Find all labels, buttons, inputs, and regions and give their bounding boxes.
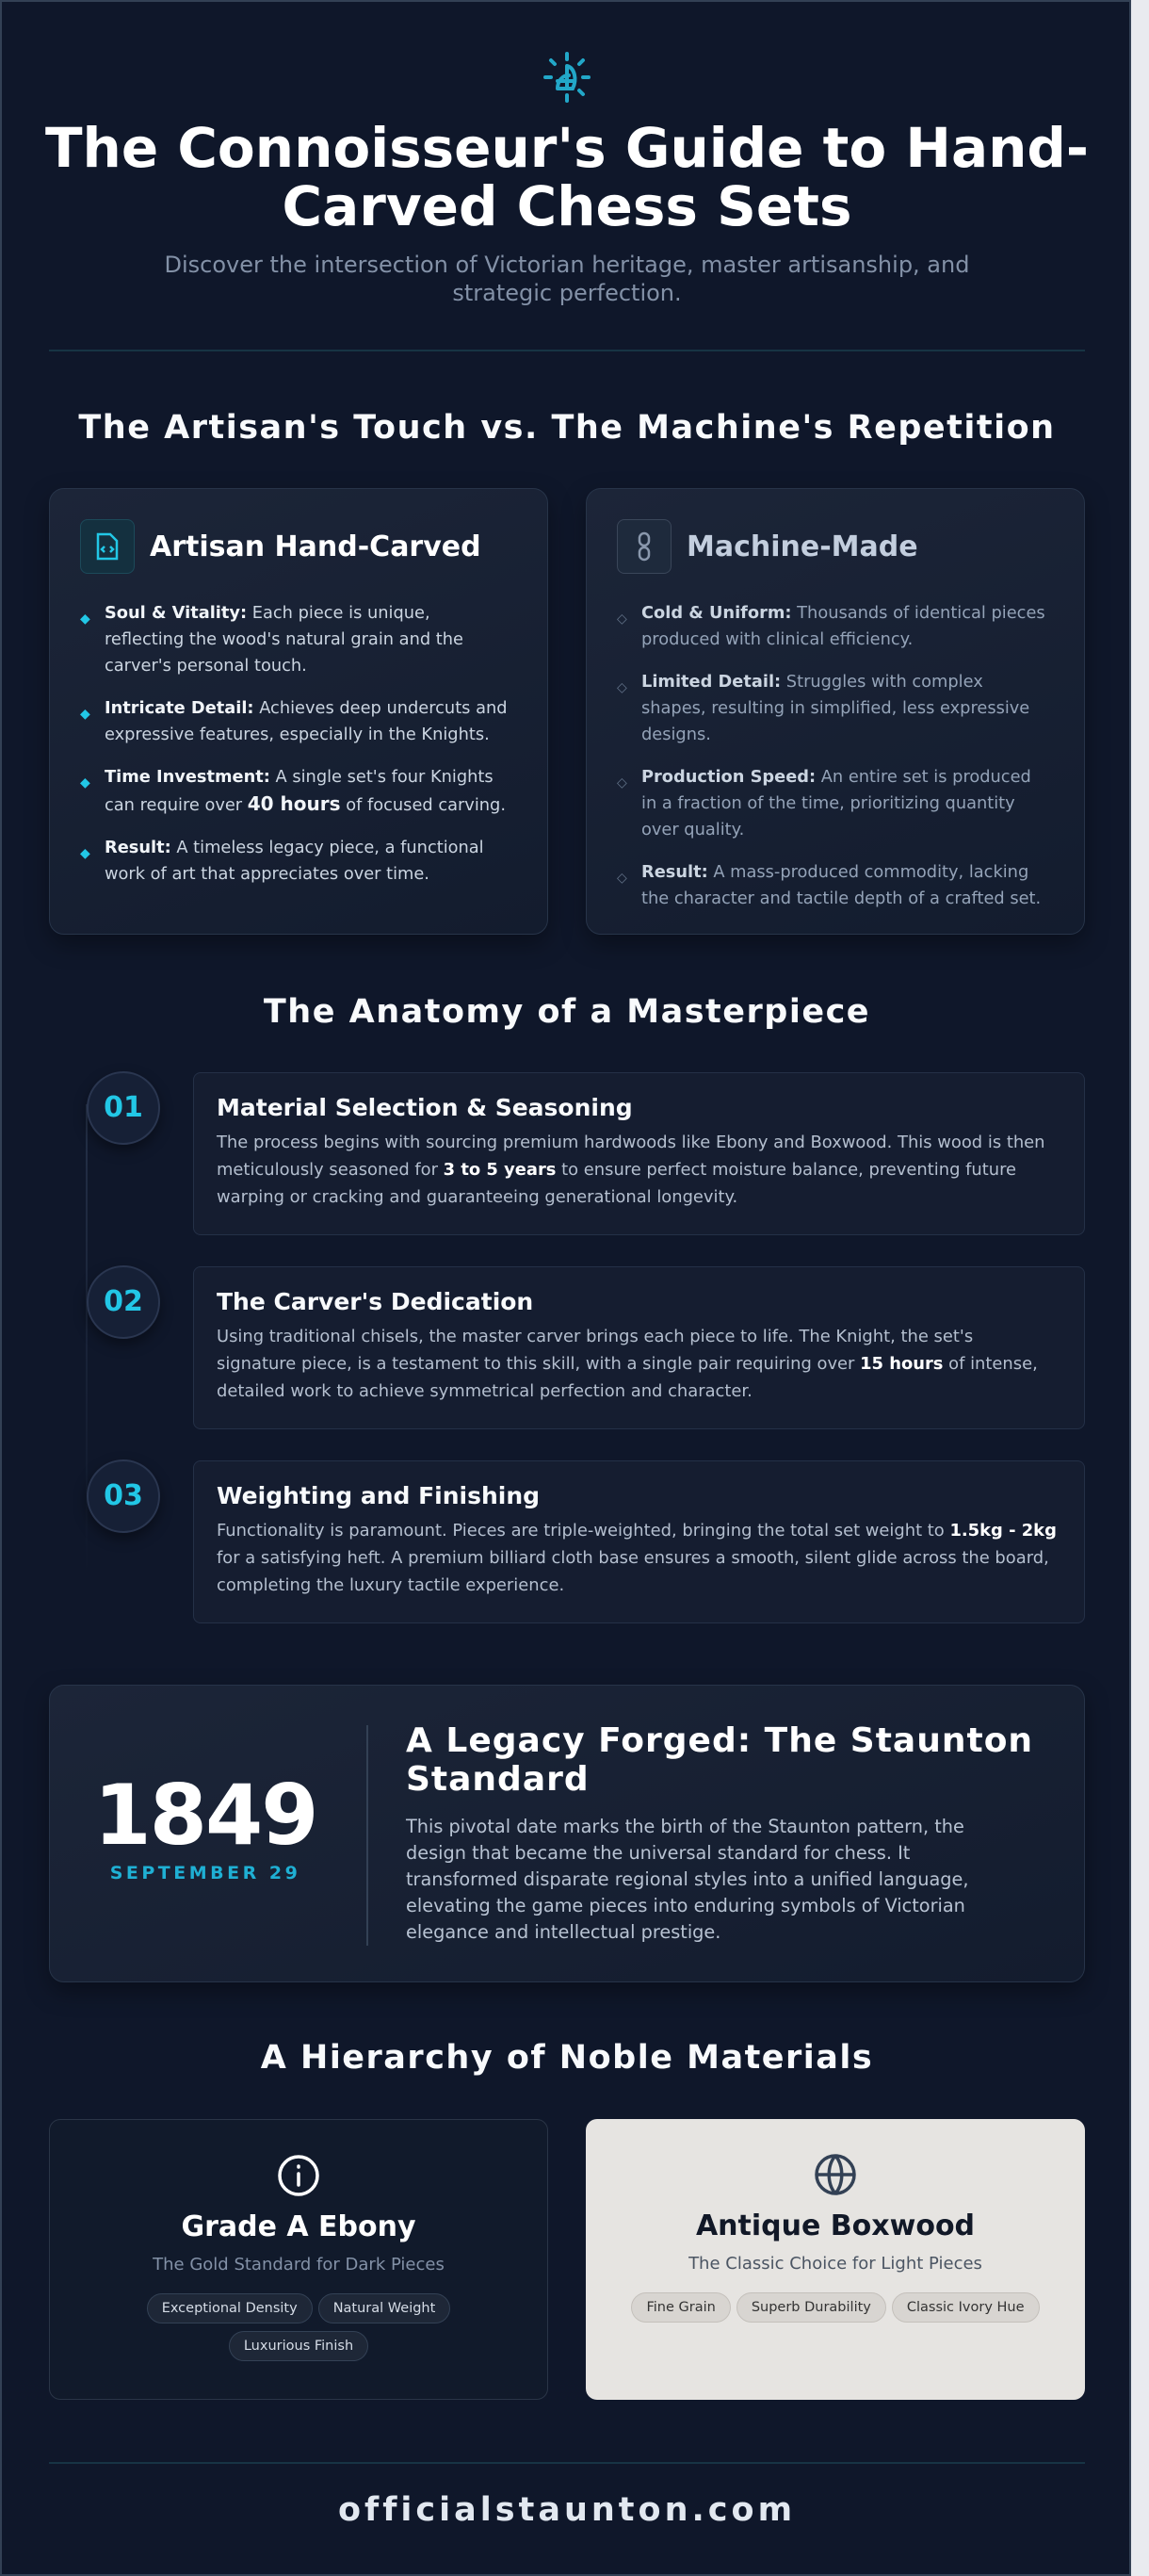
step 03 card: Weighting and Finishing <box>217 1482 540 1509</box>
icon: link <box>617 519 672 574</box>
step 01 number <box>87 1071 160 1145</box>
panel: ebony: Grade A Ebony <box>181 2210 416 2243</box>
panel: artisan: ◆ <box>80 707 90 722</box>
step 01 card <box>193 1072 1085 1235</box>
date block: 1849 <box>94 1767 316 1864</box>
date block: SEPTEMBER 29 <box>110 1863 300 1883</box>
panel: machine: Production Speed: An entire set is produced in a fraction of the time, prioritizing quantity over quality. <box>641 767 1031 840</box>
panel: machine: Result: A mass-produced commodity, lacking the character and tactile depth of a crafted set. <box>641 862 1041 908</box>
panel: boxwood <box>586 2119 1085 2400</box>
panel: boxwood: Classic Ivory Hue <box>907 2300 1025 2315</box>
panel: legacy 1849 <box>49 1685 1085 1982</box>
step 03 card: Functionality is paramount. Pieces are triple-weighted, bringing the total set weight to 1.5kg - 2kg for a satisfying heft. A premium billiard cloth base ensures a smooth, silent glide across the board, completing the luxury tactile experience. <box>217 1521 1057 1595</box>
panel: machine: ◇ <box>617 871 627 886</box>
title: Carved Chess Sets <box>283 174 851 238</box>
legacy text: A Legacy Forged: The Staunton Standard <box>406 1721 1033 1799</box>
machine header: Machine-Made <box>687 530 918 563</box>
machine header <box>617 519 918 574</box>
panel: artisan: ◆ <box>80 611 90 627</box>
panel: artisan: Time Investment: A single set's four Knights can require over 40 hours of focused carving. <box>105 767 506 815</box>
footer: officialstaunton.com <box>338 2491 796 2529</box>
panel: machine: ◇ <box>617 611 627 627</box>
subtitle: strategic perfection. <box>452 280 682 306</box>
panel: machine: ◇ <box>617 680 627 695</box>
step 03 number <box>87 1459 160 1533</box>
artisan header <box>80 519 481 574</box>
title: The Connoisseur's Guide to Hand- <box>45 116 1089 180</box>
step 03 number: 03 <box>104 1479 143 1512</box>
step 01 card: Material Selection & Seasoning <box>217 1094 633 1121</box>
panel: machine: Limited Detail: Struggles with complex <box>641 672 983 692</box>
icon: file code <box>80 519 135 574</box>
panel: boxwood: Antique Boxwood <box>696 2209 975 2242</box>
panel: ebony <box>49 2119 548 2400</box>
step 01 number: 01 <box>104 1091 143 1124</box>
step 02 card: Using traditional chisels, the master carver brings each piece to life. The Knight, the set's signature piece, is a testament to this skill, with a single pair requiring over 15 hours of intense, detailed work to achieve symmetrical perfection and character. <box>217 1327 1038 1401</box>
panel: artisan <box>49 488 548 935</box>
artisan header: Artisan Hand-Carved <box>150 530 481 563</box>
step 03 card <box>193 1460 1085 1623</box>
subtitle <box>165 252 969 306</box>
panel: artisan: Result: A timeless legacy piece, a functional work of art that appreciates over time. <box>105 838 484 884</box>
panel: machine: ◇ <box>617 775 627 791</box>
heading: materials: A Hierarchy of Noble Materials <box>261 2039 873 2077</box>
step 02 card: The Carver's Dedication <box>217 1288 533 1315</box>
legacy text <box>405 1721 1033 1943</box>
panel: boxwood: Superb Durability <box>752 2300 871 2315</box>
step 02 card <box>193 1266 1085 1429</box>
step 01 card: The process begins with sourcing premium hardwoods like Ebony and Boxwood. This wood is then meticulously seasoned for 3 to 5 years to ensure perfect moisture balance, preventing future warping or cracking and guaranteeing generational longevity. <box>217 1133 1045 1207</box>
panel: artisan: Intricate Detail: Achieves deep undercuts and expressive features, especially in the Knights. <box>105 698 508 744</box>
title <box>45 116 1089 238</box>
icon: logo <box>543 52 591 103</box>
panel: artisan: ◆ <box>80 846 90 861</box>
panel: artisan: Soul & Vitality: Each piece is unique, reflecting the wood's natural grain and the carver's personal touch. <box>105 603 463 676</box>
heading: anatomy: The Anatomy of a Masterpiece <box>264 993 870 1031</box>
icon: globe <box>815 2154 856 2195</box>
panel: artisan: ◆ <box>80 775 90 791</box>
step 02 number: 02 <box>104 1285 143 1318</box>
panel: machine: Cold & Uniform: Thousands of identical pieces produced with clinical efficiency. <box>641 603 1045 649</box>
panel: machine <box>586 488 1085 935</box>
icon: info <box>278 2155 319 2196</box>
panel: boxwood: The Classic Choice for Light Pieces <box>688 2254 982 2274</box>
panel: machine: shapes, resulting in simplified, less expressive designs. <box>641 698 1029 744</box>
subtitle: Discover the intersection of Victorian heritage, master artisanship, and <box>165 252 969 278</box>
panel: ebony: Exceptional Density <box>162 2301 298 2316</box>
panel: boxwood: Fine Grain <box>646 2300 716 2315</box>
legacy text: This pivotal date marks the birth of the Staunton pattern, the design that became the universal standard for chess. It transformed disparate regional styles into a unified language, elevating the game pieces into enduring symbols of Victorian elegance and intellectual prestige. <box>406 1816 969 1943</box>
panel: ebony: Luxurious Finish <box>244 2339 353 2354</box>
panel: ebony: Natural Weight <box>333 2301 435 2316</box>
panel: ebony: The Gold Standard for Dark Pieces <box>153 2255 445 2274</box>
heading: artisan vs machine: The Artisan's Touch vs. The Machine's Repetition <box>78 409 1056 447</box>
step 02 number <box>87 1265 160 1339</box>
